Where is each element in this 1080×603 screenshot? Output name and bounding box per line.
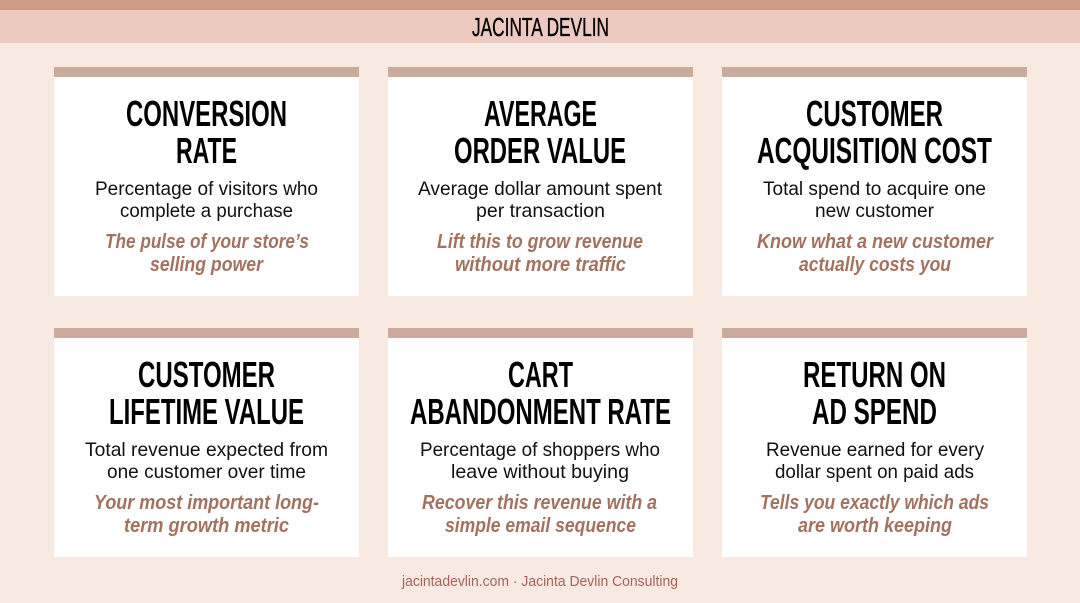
description: return on ad spend [766,439,984,483]
description: customer lifetime value: one customer over time [107,461,306,483]
tagline: return on ad spend: are worth keeping [798,514,952,537]
heading: customer lifetime value [109,354,304,432]
panel: customer lifetime value [54,328,359,557]
tagline: customer lifetime value: Your most important long- [94,491,319,514]
panel: conversion rate [54,67,359,296]
heading: average order value: AVERAGE [484,93,597,134]
description: customer acquisition cost [763,178,986,222]
description: customer lifetime value: Total revenue expected from [85,439,328,461]
heading: customer lifetime value: CUSTOMER [138,354,275,395]
description: average order value: Average dollar amount spent [418,178,663,200]
tagline: conversion rate: The pulse of your store’s [105,230,309,253]
panel: cart abandonment rate [388,328,693,557]
tagline: customer lifetime value [94,491,319,537]
tagline: cart abandonment rate: Recover this revenue with a [422,491,657,514]
tagline: cart abandonment rate [422,491,657,537]
description: conversion rate: complete a purchase [120,200,293,222]
heading: cart abandonment rate [410,354,671,432]
tagline: average order value: without more traffic [455,253,627,276]
heading: cart abandonment rate: CART [508,354,573,395]
panel: average order value [388,67,693,296]
tagline: cart abandonment rate: simple email sequence [445,514,636,537]
tagline: average order value [437,230,643,276]
description: customer acquisition cost: Total spend to acquire one [763,178,986,200]
description: average order value: per transaction [476,200,605,222]
heading: conversion rate [126,93,287,171]
description: return on ad spend: dollar spent on paid ads [775,461,974,483]
heading: conversion rate: CONVERSION [126,93,287,134]
heading: customer lifetime value: LIFETIME VALUE [109,391,304,432]
heading: return on ad spend [803,354,946,432]
description: customer acquisition cost: new customer [815,200,934,222]
tagline: conversion rate: selling power [150,253,264,276]
panel: return on ad spend [722,328,1027,557]
title: JACINTA DEVLIN [472,12,609,42]
tagline: return on ad spend: Tells you exactly which ads [760,491,989,514]
heading: average order value [454,93,626,171]
tagline: customer lifetime value: term growth metric [124,514,290,537]
description: average order value [418,178,663,222]
heading: cart abandonment rate: ABANDONMENT RATE [410,391,671,432]
description: cart abandonment rate: leave without buying [451,461,629,483]
header band [0,0,1080,43]
footer: jacintadevlin.com · Jacinta Devlin Consulting [401,574,678,590]
tagline: customer acquisition cost: Know what a new customer [757,230,994,253]
description: cart abandonment rate: Percentage of shoppers who [420,439,660,461]
description: customer lifetime value [85,439,328,483]
description: return on ad spend: Revenue earned for every [766,439,984,461]
heading: customer acquisition cost: CUSTOMER [806,93,943,134]
tagline: average order value: Lift this to grow revenue [437,230,643,253]
description: conversion rate: Percentage of visitors who [95,178,318,200]
heading: customer acquisition cost [757,93,992,171]
heading: return on ad spend: AD SPEND [812,391,937,432]
heading: return on ad spend: RETURN ON [803,354,946,395]
tagline: customer acquisition cost: actually costs you [799,253,951,276]
panel: customer acquisition cost [722,67,1027,296]
tagline: conversion rate [105,230,309,276]
description: conversion rate [95,178,318,222]
heading: conversion rate: RATE [176,130,237,171]
description: cart abandonment rate [420,439,660,483]
heading: average order value: ORDER VALUE [454,130,626,171]
tagline: customer acquisition cost [757,230,994,276]
tagline: return on ad spend [760,491,989,537]
